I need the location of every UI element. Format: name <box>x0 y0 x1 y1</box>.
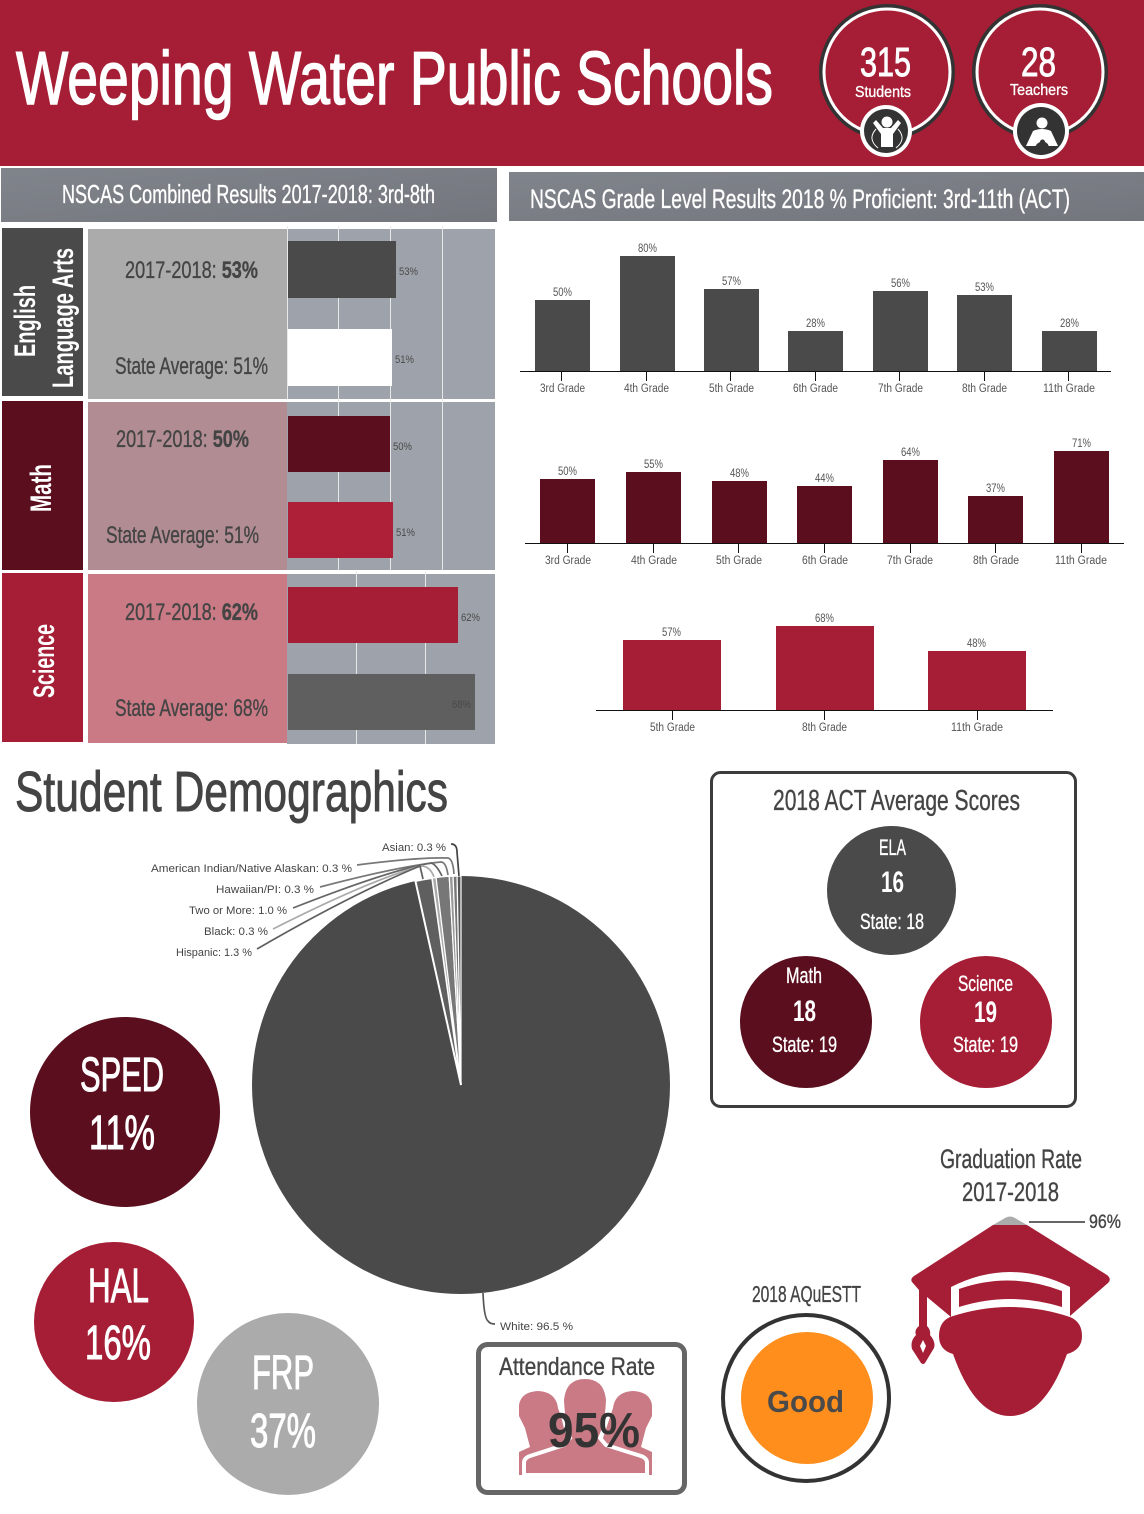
SPED circle <box>30 1017 220 1207</box>
Math score: State: 19 <box>772 1032 837 1057</box>
bar chart: Science by grade: 48% <box>967 638 986 650</box>
bar chart: ELA by grade: 7th Grade <box>878 383 923 395</box>
pie labels: Hawaiian/PI: 0.3 % <box>216 884 314 896</box>
bar chart: ELA by grade: 28% <box>1060 318 1079 330</box>
panel: Math: 2017-2018: 50% <box>116 426 249 453</box>
teachers badge <box>974 6 1106 159</box>
SPED circle: SPED <box>80 1049 164 1102</box>
pie labels: Two or More: 1.0 % <box>189 905 287 917</box>
bar chart: Science by grade: 5th Grade <box>650 722 695 734</box>
students badge: Students <box>855 84 911 101</box>
HAL circle: HAL <box>88 1260 149 1313</box>
bar chart: Math by grade: 50% <box>558 466 577 478</box>
panel heading: combined results <box>1 168 497 222</box>
panel: English Language Arts: Language Arts <box>47 248 80 388</box>
panel: Math: 50% <box>393 441 412 453</box>
panel: Science: 2017-2018: 62% <box>125 599 258 626</box>
FRP circle: 37% <box>250 1405 316 1458</box>
bar chart: ELA by grade: 4th Grade <box>624 383 669 395</box>
bar chart: ELA by grade: 11th Grade <box>1043 383 1095 395</box>
students badge: 315 <box>860 39 911 85</box>
panel heading: combined results: NSCAS Combined Results 2017-2018: 3rd-8th <box>62 179 435 209</box>
pie labels <box>151 842 573 1333</box>
Science score: 19 <box>974 996 997 1029</box>
panel: English Language Arts: State Average: 51% <box>115 353 268 380</box>
ELA score: State: 18 <box>860 909 924 934</box>
bar chart: Math by grade: 48% <box>730 468 749 480</box>
graduation rate: 2017-2018 <box>962 1177 1059 1207</box>
bar chart: Math by grade: 4th Grade <box>631 555 677 567</box>
panel: English Language Arts <box>2 226 495 399</box>
Science score: Science <box>958 971 1013 996</box>
bar chart: ELA by grade: 6th Grade <box>793 383 838 395</box>
bar chart: ELA by grade: 57% <box>722 276 741 288</box>
graduation rate: 96% <box>1089 1212 1121 1233</box>
bar chart: Science by grade: 11th Grade <box>951 722 1003 734</box>
panel: ACT scores <box>712 772 1076 1106</box>
AQuESTT rating <box>723 1281 889 1481</box>
title: Weeping Water Public Schools <box>16 36 773 120</box>
panel: Science: State Average: 68% <box>115 695 268 722</box>
FRP circle: FRP <box>252 1347 314 1400</box>
bar chart: Science by grade: 57% <box>662 627 681 639</box>
HAL circle: 16% <box>85 1317 151 1370</box>
AQuESTT rating: Good <box>767 1384 844 1419</box>
panel: Science <box>2 571 495 744</box>
bar chart: Science by grade: 68% <box>815 613 834 625</box>
panel: ACT scores: 2018 ACT Average Scores <box>773 785 1020 817</box>
panel: Science: 68% <box>452 699 471 711</box>
bar chart: ELA by grade: 50% <box>553 287 572 299</box>
bar chart: Science by grade: 8th Grade <box>802 722 847 734</box>
bar chart: Math by grade: 37% <box>986 483 1005 495</box>
bar chart: Math by grade: 71% <box>1072 438 1091 450</box>
Science score <box>920 956 1052 1088</box>
teachers badge: Teachers <box>1010 82 1068 99</box>
bar chart: ELA by grade: 53% <box>975 282 994 294</box>
graduation rate <box>911 1144 1121 1416</box>
FRP circle <box>197 1313 379 1495</box>
AQuESTT rating: 2018 AQuESTT <box>752 1281 861 1307</box>
bar chart: Math by grade: 7th Grade <box>887 555 933 567</box>
bar chart: Math by grade: 64% <box>901 447 920 459</box>
panel: attendance rate: 95% <box>548 1404 640 1458</box>
pie labels: American Indian/Native Alaskan: 0.3 % <box>151 863 352 875</box>
pie labels: Black: 0.3 % <box>204 926 268 938</box>
header banner <box>0 0 1144 166</box>
bar chart: Math by grade <box>525 438 1124 567</box>
ELA score: ELA <box>879 835 906 860</box>
heading: student demographics: Student Demographics <box>15 760 448 824</box>
panel: Science: Science <box>28 624 61 698</box>
bar chart: Math by grade: 8th Grade <box>973 555 1019 567</box>
panel: Math: State Average: 51% <box>106 522 259 549</box>
panel: English Language Arts: English <box>9 285 42 357</box>
bar chart: Math by grade: 6th Grade <box>802 555 848 567</box>
bar chart: ELA by grade: 5th Grade <box>709 383 754 395</box>
Math score: Math <box>786 963 822 988</box>
pie labels: Asian: 0.3 % <box>382 842 446 854</box>
panel: Math <box>2 399 495 570</box>
panel: Math: Math <box>25 464 58 512</box>
HAL circle <box>34 1242 194 1402</box>
Math score <box>740 956 872 1088</box>
panel: Math: 51% <box>396 527 415 539</box>
pie labels: White: 96.5 % <box>500 1321 573 1333</box>
panel heading: grade level results <box>509 172 1144 221</box>
bar chart: Math by grade: 55% <box>644 459 663 471</box>
panel: Science: 62% <box>461 612 480 624</box>
panel: attendance rate: Attendance Rate <box>499 1353 655 1381</box>
panel: attendance rate <box>478 1344 684 1492</box>
panel: English Language Arts: 2017-2018: 53% <box>125 257 258 284</box>
ELA score: 16 <box>881 866 904 899</box>
bar chart: ELA by grade: 8th Grade <box>962 383 1007 395</box>
bar chart: ELA by grade: 28% <box>806 318 825 330</box>
bar chart: Math by grade: 5th Grade <box>716 555 762 567</box>
panel: English Language Arts: 53% <box>399 266 418 278</box>
pie labels: Hispanic: 1.3 % <box>176 947 252 959</box>
bar chart: Math by grade: 44% <box>815 473 834 485</box>
icon: teacher <box>1013 103 1069 159</box>
panel: English Language Arts: 51% <box>395 354 414 366</box>
icon: graduation cap <box>911 1216 1110 1416</box>
pie chart: demographics <box>151 842 670 1333</box>
icon: people silhouettes <box>519 1377 652 1475</box>
bar chart: ELA by grade: 56% <box>891 278 910 290</box>
bar chart: Math by grade: 11th Grade <box>1055 555 1107 567</box>
icon: child <box>860 105 912 157</box>
teachers badge: 28 <box>1021 39 1056 85</box>
Math score: 18 <box>793 995 816 1028</box>
bar chart: Math by grade: 3rd Grade <box>545 555 591 567</box>
Science score: State: 19 <box>953 1032 1018 1057</box>
bar chart: ELA by grade: 3rd Grade <box>540 383 585 395</box>
bar chart: ELA by grade: 80% <box>638 243 657 255</box>
graduation rate: Graduation Rate <box>940 1144 1082 1174</box>
SPED circle: 11% <box>89 1107 155 1160</box>
students badge <box>821 6 953 157</box>
bar chart: Science by grade <box>596 613 1053 734</box>
bar chart: ELA by grade <box>520 243 1111 395</box>
ELA score <box>827 826 956 955</box>
